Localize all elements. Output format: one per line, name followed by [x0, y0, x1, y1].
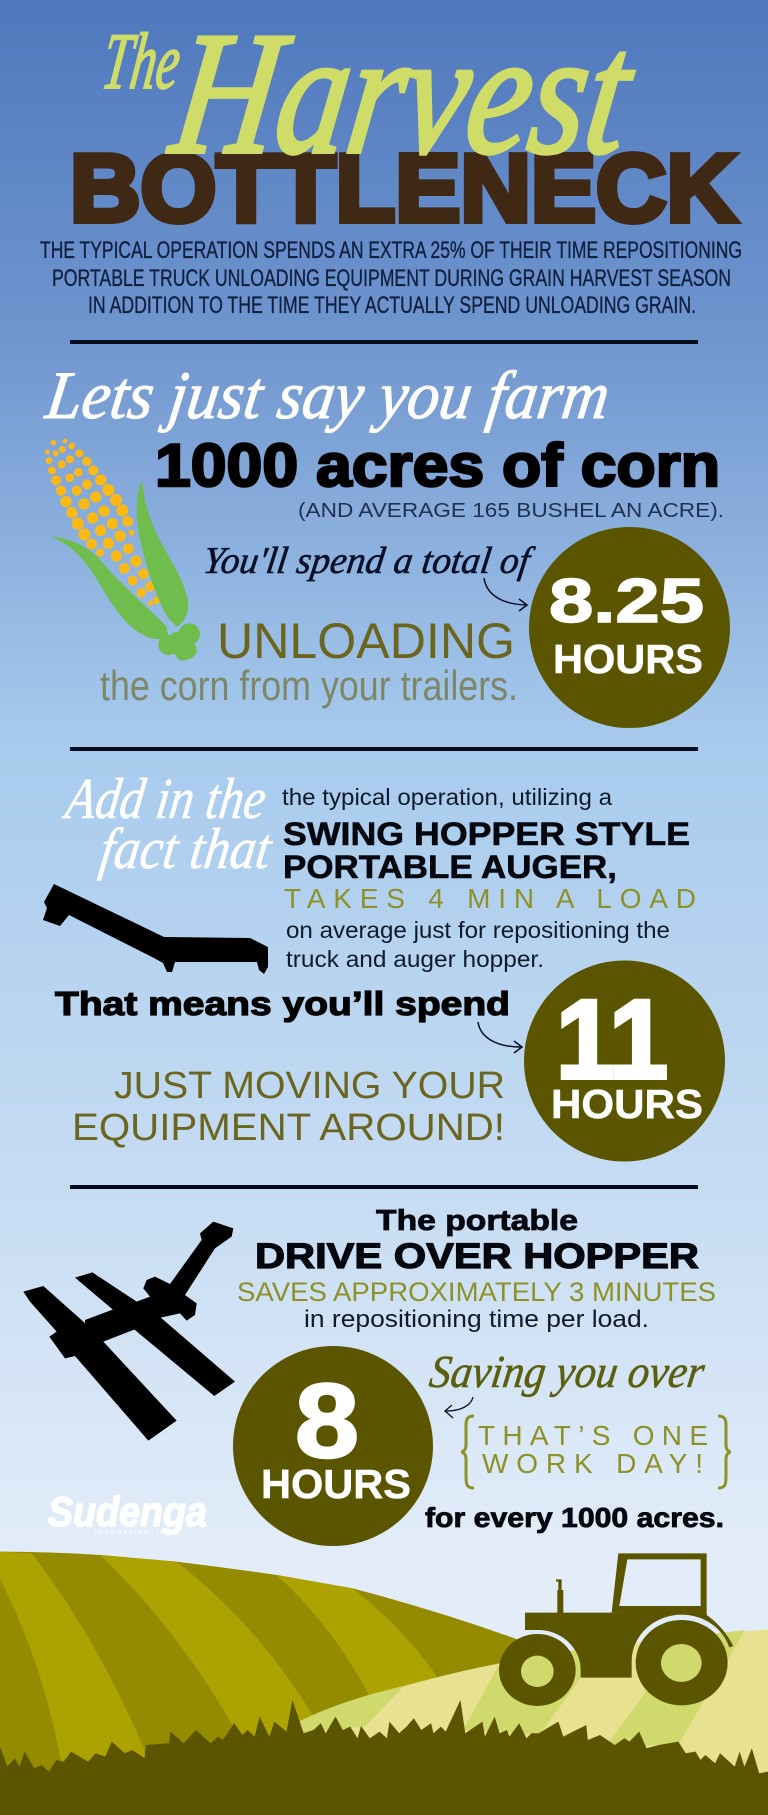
panel: drive over hopper [23, 1205, 731, 1546]
icon: corn cob [45, 439, 200, 661]
text: repositioning [286, 917, 670, 972]
text: takes 4 min a load: TAKES 4 MIN A LOAD [284, 883, 696, 914]
callout: that's one work day: WORK DAY! [482, 1448, 703, 1479]
text: repositioning time per load: in repositioning time per load. [304, 1306, 649, 1333]
callout: 11 hours circle: 11 [556, 977, 668, 1102]
callout: 8 hours circle: HOURS [261, 1461, 411, 1507]
front hill with stripes [274, 1629, 768, 1815]
text: That means you'll spend: That means you’ll spend [55, 985, 510, 1022]
back hill with stripes [0, 1552, 539, 1800]
panel: title header [40, 0, 742, 319]
heading: swing hopper style portable auger: SWING HOPPER STYLE [283, 816, 690, 852]
icon: swing hopper auger silhouette [43, 884, 268, 974]
text: UNLOADING: UNLOADING [217, 613, 515, 669]
callout: 8.25 hours circle [529, 527, 730, 728]
text: just moving your equipment around [72, 1065, 505, 1149]
heading: Add in the fact that: fact that [96, 816, 277, 881]
logo: Sudenga: INDUSTRIES, INC [95, 1529, 171, 1536]
text: just moving your equipment around: EQUIPMENT AROUND! [72, 1107, 505, 1149]
text: typical operation: the typical operation, utilizing a [282, 784, 612, 810]
panel: swing hopper auger [43, 766, 725, 1162]
text: Saving you over: Saving you over [427, 1346, 709, 1397]
text: saves approximately 3 minutes: SAVES APPROXIMATELY 3 MINUTES [237, 1277, 716, 1307]
icon: tractor [499, 1553, 733, 1706]
text: the corn from your trailers: the corn from your trailers. [100, 662, 518, 709]
heading: 1000 acres of corn: 1000 acres of corn [155, 432, 720, 499]
text: average bushels: (AND AVERAGE 165 BUSHEL AN ACRE). [298, 500, 724, 522]
arrow: to 8.25 hours [484, 578, 527, 611]
arrow: to 11 hours [478, 1022, 522, 1053]
text: The portable: The portable [376, 1205, 578, 1237]
illustration: farm landscape [0, 1552, 768, 1815]
heading: BOTTLENECK: BOTTLENECK [70, 135, 737, 242]
foreground grass [0, 1700, 768, 1815]
text block: intro [40, 237, 742, 319]
heading: swing hopper style portable auger: PORTABLE AUGER, [283, 849, 617, 885]
icon: drive over hopper silhouette [23, 1222, 235, 1441]
heading: DRIVE OVER HOPPER: DRIVE OVER HOPPER [255, 1237, 699, 1276]
text: for every 1000 acres: for every 1000 acres. [425, 1502, 724, 1533]
heading: The: The [97, 17, 186, 106]
text: just moving your equipment around: JUST MOVING YOUR [114, 1065, 505, 1107]
callout: that's one work day [461, 1416, 731, 1488]
callout: 8.25 hours circle: HOURS [553, 636, 703, 682]
heading: Add in the fact that: Add in the [59, 766, 270, 831]
heading: Harvest: Harvest [161, 0, 645, 191]
panel: unloading corn [41, 357, 730, 728]
callout: 8.25 hours circle: 8.25 [549, 567, 704, 636]
logo: Sudenga: Sudenga [48, 1488, 207, 1535]
callout: 11 hours circle [524, 960, 725, 1162]
heading: swing hopper style portable auger [283, 816, 690, 885]
callout: 11 hours circle: HOURS [551, 1081, 703, 1127]
heading: Lets just say you farm: Lets just say you farm [41, 357, 615, 433]
text: You'll spend a total of: You'll spend a total of [201, 540, 537, 582]
text: repositioning: truck and auger hopper. [286, 946, 544, 972]
callout: 8 hours circle [233, 1346, 433, 1546]
callout: that's one work day: THAT’S ONE [478, 1420, 708, 1451]
heading: Add in the fact that [59, 766, 277, 881]
callout: 8 hours circle: 8 [295, 1363, 359, 1480]
arrow: to 8 hours [445, 1397, 473, 1418]
text: repositioning: on average just for repositioning the [286, 917, 670, 943]
